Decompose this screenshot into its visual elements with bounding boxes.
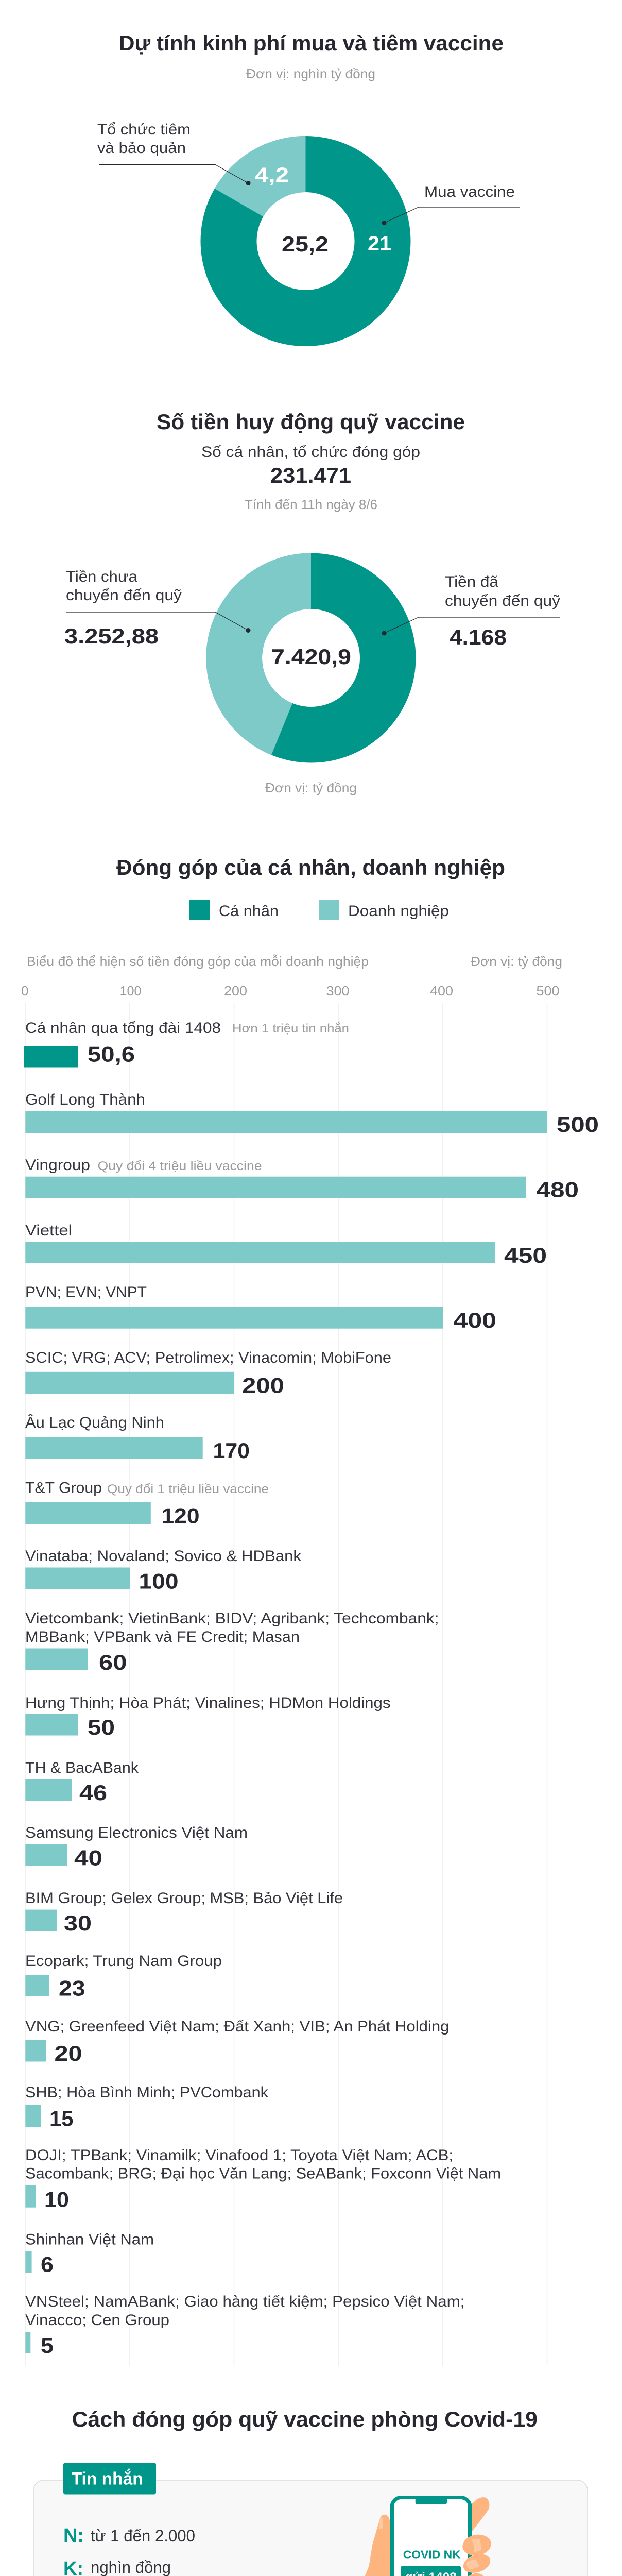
- bar: [25, 1567, 130, 1589]
- row: SHB group: SHB; Hòa Bình Minh; PVCombank: [25, 2084, 269, 2101]
- row: Vingroup: 480: [537, 1178, 579, 1201]
- callout: not yet transferred: chuyển đến quỹ: [66, 587, 182, 604]
- row: Hưng Thịnh group: Hưng Thịnh; Hòa Phát; Vinalines; HDMon Holdings: [25, 1694, 391, 1711]
- illustration: hands holding phone: [313, 2496, 562, 2576]
- chart description: Biểu đồ thể hiện số tiền đóng góp của mỗi doanh nghiệp: [27, 954, 369, 969]
- row: Hưng Thịnh group: 50: [88, 1715, 115, 1739]
- callout: transferred: [382, 573, 560, 649]
- row: individuals via 1408: Hơn 1 triệu tin nhắn: [232, 1022, 349, 1036]
- unit note: Đơn vị: nghìn tỷ đồng: [246, 66, 375, 81]
- bar: [25, 2105, 41, 2127]
- legend: Doanh nghiệp: [348, 903, 449, 920]
- row: Viettel: 450: [504, 1243, 547, 1267]
- callout: organize and store: Tổ chức tiêm: [97, 121, 191, 138]
- row: VNG group: VNG; Greenfeed Việt Nam; Đất Xanh; VIB; An Phát Holding: [25, 2018, 449, 2035]
- heading: how to contribute: Cách đóng góp quỹ vaccine phòng Covid-19: [72, 2407, 538, 2431]
- panel: text message: [33, 2463, 588, 2576]
- unit note: Đơn vị: tỷ đồng: [265, 780, 357, 795]
- row: Âu Lạc Quảng Ninh: [25, 1414, 250, 1463]
- row: Viettel: [25, 1222, 547, 1267]
- row: VNSteel group: [25, 2293, 464, 2358]
- row: Vingroup: Quy đổi 4 triệu liều vaccine: [98, 1159, 262, 1173]
- row: TH & BacABank: 46: [79, 1781, 107, 1805]
- donut chart: funds: [206, 553, 416, 762]
- axis labels: [21, 983, 559, 998]
- row: SCIC group: SCIC; VRG; ACV; Petrolimex; Vinacomin; MobiFone: [25, 1349, 391, 1366]
- donut chart: budget: [201, 136, 411, 346]
- heading: Số tiền huy động quỹ vaccine: [157, 410, 465, 434]
- phone: COVID NK: [403, 2548, 461, 2562]
- row: VNSteel group: 5: [41, 2333, 54, 2358]
- legend: N: [63, 2525, 195, 2547]
- legend: [189, 900, 449, 920]
- contributor label: Số cá nhân, tổ chức đóng góp: [201, 444, 420, 461]
- bar: [25, 2040, 46, 2062]
- row: SHB group: [25, 2084, 269, 2131]
- row: PVN EVN VNPT: 400: [453, 1308, 496, 1332]
- legend: K: nghìn đồng: [91, 2558, 171, 2576]
- row: DOJI group: DOJI; TPBank; Vinamilk; Vinafood 1; Toyota Việt Nam; ACB;: [25, 2147, 453, 2164]
- row: Vingroup: [25, 1157, 579, 1201]
- back fingers: [469, 2497, 489, 2532]
- bar: [25, 1779, 72, 1801]
- row: T&T Group: 120: [162, 1503, 200, 1528]
- callout: buy vaccine: [382, 183, 520, 225]
- callout: organize and store: và bảo quản: [97, 140, 186, 157]
- axis labels: 400: [430, 983, 453, 998]
- row: Samsung: Samsung Electronics Việt Nam: [25, 1824, 248, 1841]
- bar: [25, 1437, 203, 1459]
- row: Golf Long Thành: Golf Long Thành: [25, 1091, 145, 1108]
- row: individuals via 1408: [24, 1020, 349, 1067]
- bar: [25, 2332, 30, 2353]
- row: Samsung: [25, 1824, 248, 1870]
- bar: [25, 2185, 36, 2208]
- row: T&T Group: [25, 1480, 269, 1528]
- donut chart: budget: 21: [368, 232, 391, 255]
- axis labels: 300: [326, 983, 349, 998]
- axis labels: 500: [537, 983, 559, 998]
- bar: [24, 1046, 78, 1067]
- callout: not yet transferred: Tiền chưa: [66, 568, 137, 585]
- row: SHB group: 15: [49, 2106, 73, 2131]
- row: Ecopark group: Ecopark; Trung Nam Group: [25, 1953, 222, 1970]
- row: Vingroup: Vingroup: [25, 1157, 90, 1174]
- bar: [25, 1844, 67, 1866]
- donut chart: budget: 4,2: [255, 164, 289, 187]
- bar: [25, 1372, 234, 1394]
- bar: [25, 1649, 88, 1670]
- phone: [390, 2496, 472, 2576]
- row: SCIC group: [25, 1349, 391, 1397]
- row: BIM group: 30: [64, 1911, 92, 1935]
- section: funds raised: [64, 410, 560, 795]
- row: individuals via 1408: 50,6: [88, 1042, 135, 1066]
- row: Hưng Thịnh group: [25, 1694, 391, 1739]
- row: VNSteel group: Vinacco; Cen Group: [25, 2312, 169, 2329]
- gripping fingers: [461, 2532, 493, 2576]
- row: Golf Long Thành: 500: [557, 1112, 599, 1137]
- heading: Đóng góp của cá nhân, doanh nghiệp: [116, 855, 505, 879]
- row: individuals via 1408: Cá nhân qua tổng đài 1408: [25, 1020, 221, 1037]
- heading: Dự tính kinh phí mua và tiêm vaccine: [119, 31, 504, 55]
- callout: transferred: chuyển đến quỹ: [445, 592, 560, 609]
- row: PVN EVN VNPT: [25, 1284, 496, 1332]
- bar: [25, 1307, 443, 1329]
- contributor count: 231.471: [270, 463, 351, 487]
- row: Âu Lạc Quảng Ninh: Âu Lạc Quảng Ninh: [25, 1414, 164, 1431]
- chart unit: Đơn vị: tỷ đồng: [471, 954, 562, 969]
- bar: [25, 1502, 151, 1524]
- axis labels: 100: [119, 983, 141, 998]
- callout: not yet transferred: [64, 568, 250, 648]
- row: Vinataba group: Vinataba; Novaland; Sovico & HDBank: [25, 1548, 302, 1565]
- row: TH & BacABank: TH & BacABank: [25, 1759, 139, 1776]
- row: Golf Long Thành: [25, 1091, 599, 1137]
- row: banks group: 60: [99, 1650, 127, 1674]
- row: Âu Lạc Quảng Ninh: 170: [213, 1438, 250, 1463]
- left hand: [357, 2515, 426, 2576]
- callout: transferred: Tiền đã: [445, 573, 498, 590]
- row: BIM group: BIM Group; Gelex Group; MSB; Bảo Việt Life: [25, 1890, 343, 1907]
- bar: [25, 1177, 526, 1198]
- legend: Cá nhân: [219, 903, 279, 920]
- bar: [25, 2251, 32, 2273]
- section: contributions: [21, 855, 599, 2366]
- row: banks group: Vietcombank; VietinBank; BIDV; Agribank; Techcombank;: [25, 1610, 439, 1627]
- row: TH & BacABank: [25, 1759, 139, 1805]
- row: DOJI group: 10: [44, 2188, 69, 2211]
- row: Shinhan: Shinhan Việt Nam: [25, 2231, 154, 2248]
- row: BIM group: [25, 1890, 343, 1935]
- section: estimated vaccine budget: [97, 31, 520, 346]
- row: Ecopark group: [25, 1953, 222, 2000]
- callout: organize and store: [97, 121, 250, 185]
- row: Viettel: Viettel: [25, 1222, 72, 1239]
- tag: text message: Tin nhắn: [72, 2469, 143, 2488]
- row: Shinhan: 6: [41, 2252, 54, 2276]
- row: banks group: [25, 1610, 439, 1674]
- row: PVN EVN VNPT: PVN; EVN; VNPT: [25, 1284, 147, 1301]
- date note: Tính đến 11h ngày 8/6: [245, 497, 377, 512]
- bar: [25, 1910, 57, 1931]
- row: DOJI group: Sacombank; BRG; Đại học Văn Lang; SeABank; Foxconn Việt Nam: [25, 2165, 501, 2182]
- row: Vinataba group: 100: [139, 1569, 178, 1593]
- row: Shinhan: [25, 2231, 154, 2276]
- callout: buy vaccine: Mua vaccine: [424, 183, 515, 200]
- callout: not yet transferred: 3.252,88: [64, 624, 159, 648]
- bar: [25, 1111, 547, 1133]
- axis labels: 200: [224, 983, 247, 998]
- row: Ecopark group: 23: [59, 1976, 85, 2000]
- row: Vinataba group: [25, 1548, 302, 1593]
- axis labels: 0: [21, 983, 28, 998]
- row: Samsung: 40: [74, 1845, 102, 1870]
- callout: transferred: 4.168: [450, 625, 507, 649]
- row: SCIC group: 200: [242, 1374, 284, 1397]
- legend: N: N:: [63, 2525, 84, 2547]
- tag: text message: [63, 2463, 156, 2495]
- bar: [25, 1714, 78, 1735]
- row: VNSteel group: VNSteel; NamABank; Giao hàng tiết kiệm; Pepsico Việt Nam;: [25, 2293, 464, 2310]
- row: T&T Group: T&T Group: [25, 1480, 102, 1496]
- row: banks group: MBBank; VPBank và FE Credit; Masan: [25, 1629, 300, 1646]
- row: VNG group: 20: [55, 2041, 82, 2065]
- bar: [25, 1975, 49, 1996]
- bar: [25, 1242, 495, 1263]
- donut chart: funds: 7.420,9: [271, 645, 351, 669]
- row: T&T Group: Quy đổi 1 triệu liều vaccine: [107, 1482, 269, 1496]
- row: DOJI group: [25, 2147, 501, 2211]
- row: VNG group: [25, 2018, 449, 2065]
- donut chart: budget: 25,2: [282, 232, 329, 256]
- legend: N: từ 1 đến 2.000: [91, 2527, 195, 2545]
